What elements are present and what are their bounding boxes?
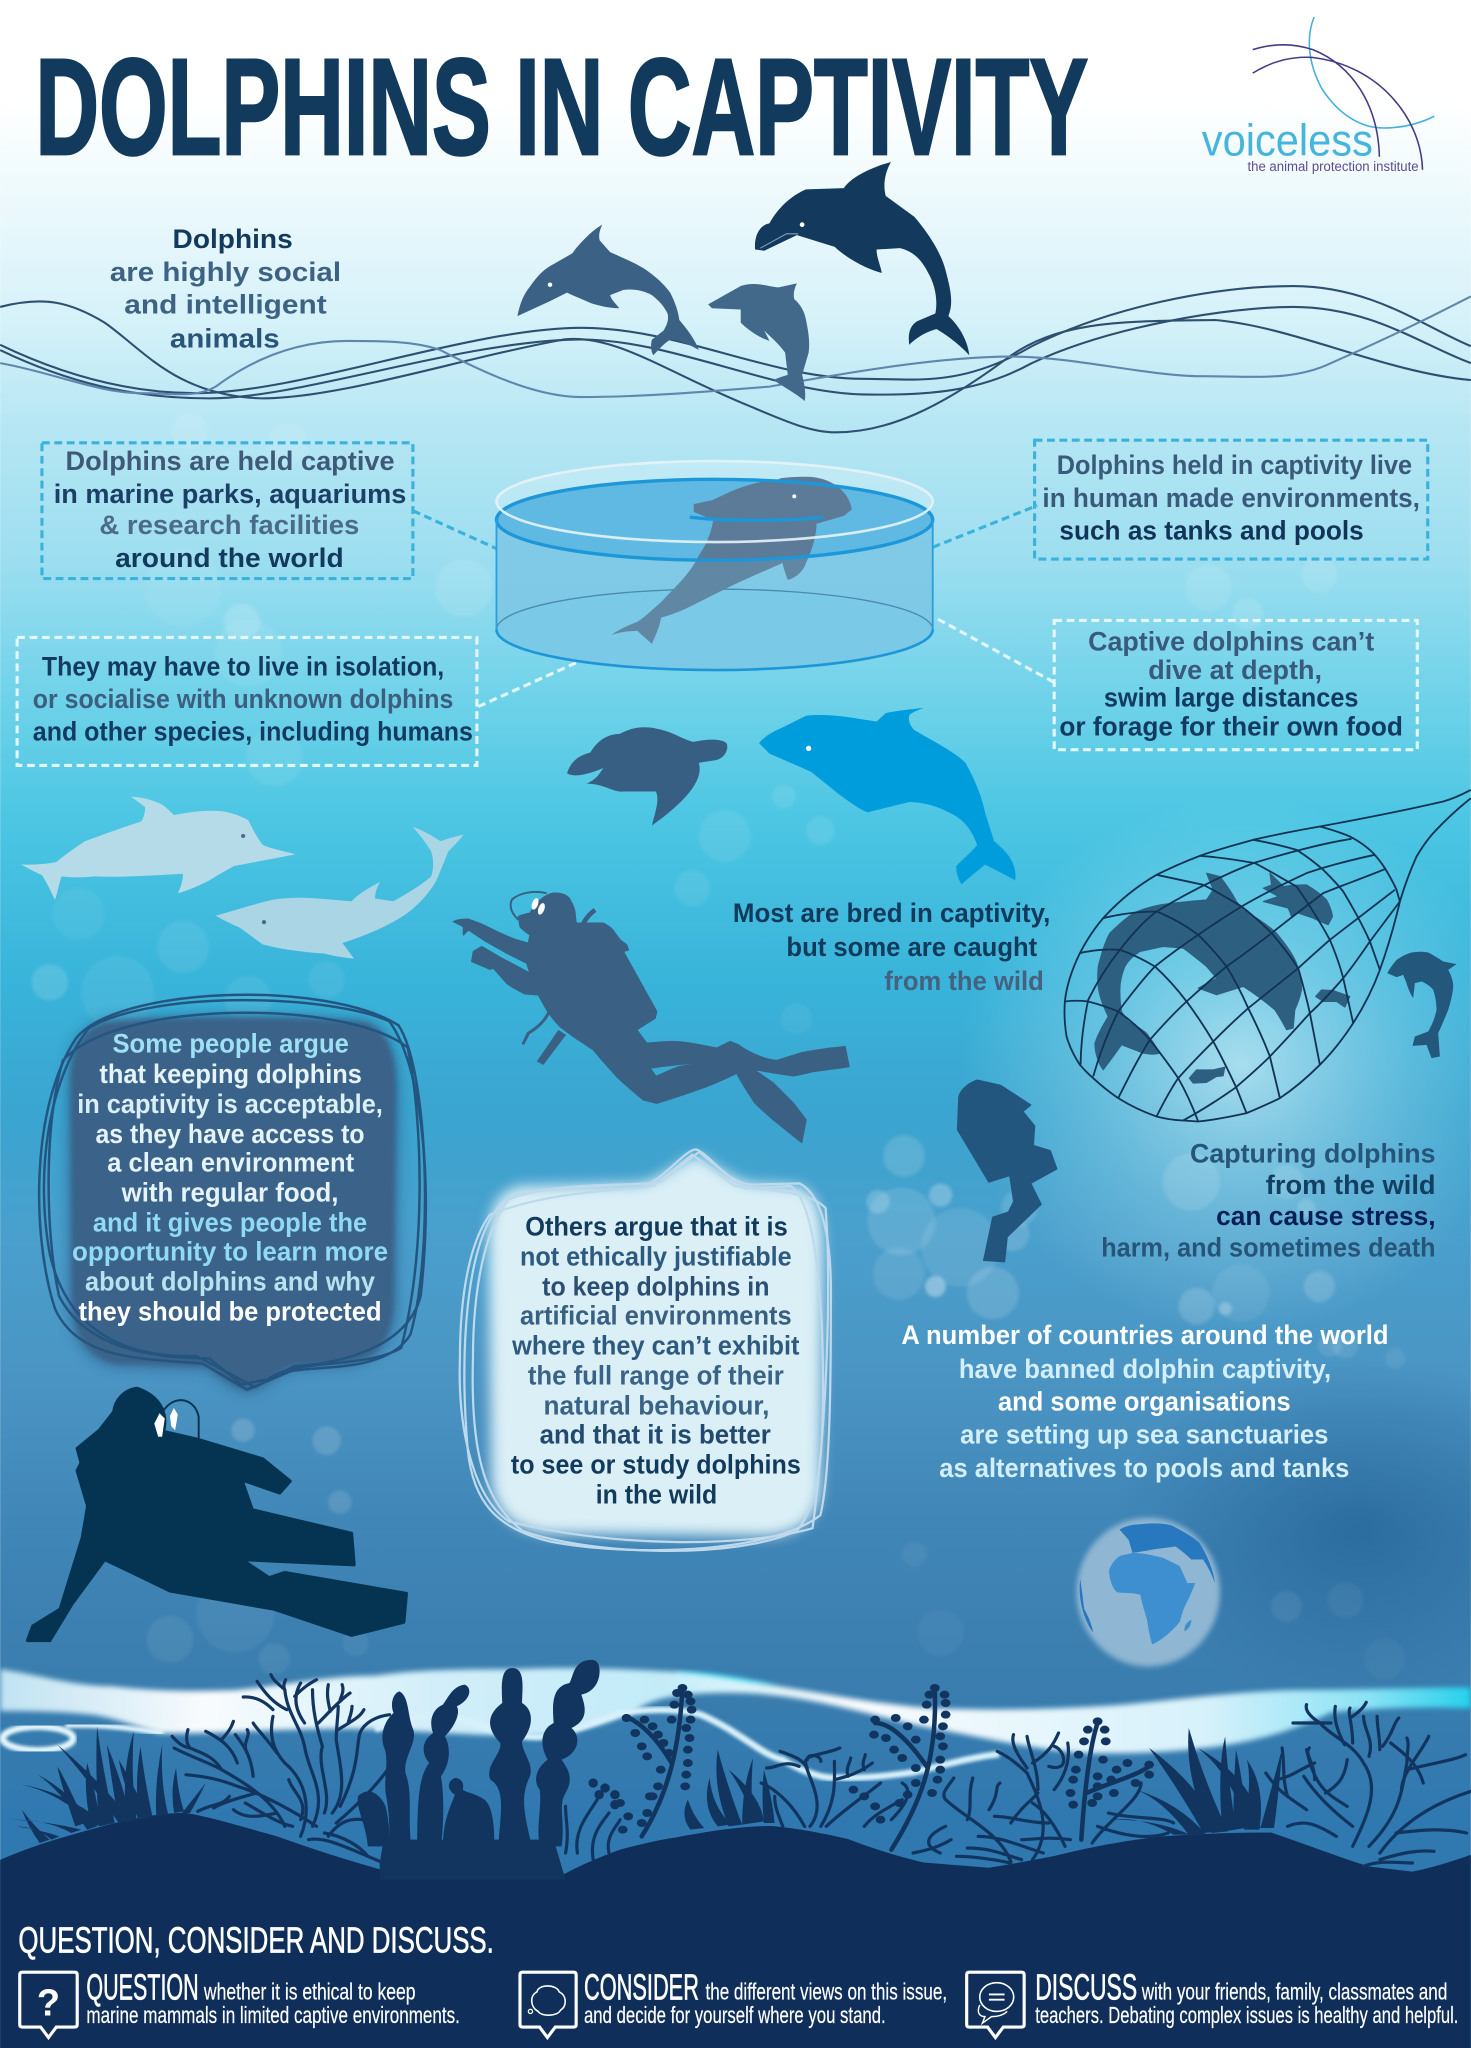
speech bubble: not justifiable view: natural behaviour, <box>543 1391 769 1421</box>
speech bubble: not justifiable view: to see or study dolphins <box>511 1449 801 1479</box>
text: dolphins are social: are highly social <box>110 257 341 287</box>
speech bubble: acceptable view: opportunity to learn more <box>72 1236 388 1266</box>
dolphin: pale swimming left <box>21 797 295 900</box>
pool callout: isolation <box>17 637 477 765</box>
footer heading: QUESTION, CONSIDER AND DISCUSS. <box>18 1920 494 1961</box>
text: dolphins are social: and intelligent <box>124 289 327 319</box>
diver: mid swimming <box>453 892 849 1143</box>
pool callout: isolation: They may have to live in isolation, <box>42 651 444 681</box>
speech bubble: not justifiable view: not ethically justifiable <box>520 1242 792 1272</box>
dolphin: large dark leaping <box>755 162 969 355</box>
footer hills <box>0 1813 1471 2048</box>
pool callout: held captive: Dolphins are held captive <box>65 446 395 476</box>
pool callout: cannot dive: or forage for their own food <box>1059 711 1403 741</box>
speech bubble: acceptable view: that keeping dolphins <box>99 1059 362 1089</box>
speech bubble: acceptable view: about dolphins and why <box>85 1266 375 1296</box>
text: dolphins are social <box>110 224 341 353</box>
pool callout: human made environments: in human made environments, <box>1042 483 1420 513</box>
speech bubble: not justifiable view: the full range of their <box>528 1360 784 1390</box>
pool callout: held captive: in marine parks, aquariums <box>54 479 406 509</box>
pool callout: isolation: or socialise with unknown dolphins <box>33 684 453 714</box>
white surface band <box>0 1668 1471 1778</box>
text: capturing dolphins <box>1101 1138 1436 1262</box>
consider text: the different views on this issue, <box>705 1979 947 2005</box>
discuss text: DISCUSS <box>1035 1967 1137 2008</box>
text: capturing dolphins: from the wild <box>1266 1170 1436 1200</box>
speech bubble: acceptable view: Some people argue <box>112 1029 349 1059</box>
pool callout: human made environments <box>1035 440 1428 559</box>
question text: whether it is ethical to keep <box>203 1979 416 2005</box>
text: capturing dolphins: can cause stress, <box>1216 1201 1436 1231</box>
turtle <box>567 727 727 825</box>
speech bubble: acceptable view: and it gives people the <box>93 1208 367 1238</box>
wave lines <box>0 286 1471 432</box>
pool callout: cannot dive: swim large distances <box>1104 683 1359 713</box>
seabed plants right: pods, coral and grass <box>615 1684 1471 1866</box>
question text <box>86 1967 460 2028</box>
icon: consider thought bubble <box>520 1972 576 2038</box>
text: dolphins are social: Dolphins <box>173 224 293 254</box>
text: capturing dolphins: harm, and sometimes death <box>1101 1232 1436 1262</box>
consider text <box>584 1967 947 2028</box>
speech bubble: not justifiable view: artificial environments <box>520 1300 792 1330</box>
pool callout: cannot dive: dive at depth, <box>1148 655 1322 685</box>
text: countries banned captivity: are setting up sea sanctuaries <box>960 1419 1328 1449</box>
speech bubble: acceptable view <box>39 995 426 1390</box>
text: countries banned captivity <box>901 1320 1389 1483</box>
speech bubble: acceptable view: they should be protected <box>79 1296 382 1326</box>
consider text: and decide for yourself where you stand. <box>584 2002 886 2028</box>
fishing net <box>1064 790 1471 1121</box>
speech bubble: acceptable view: as they have access to <box>95 1119 365 1149</box>
speech bubble: acceptable view: a clean environment <box>107 1148 354 1178</box>
text: most are bred in captivity: but some are caught <box>786 932 1037 962</box>
discuss text <box>1035 1967 1458 2028</box>
logo: voiceless: voiceless <box>1202 116 1373 165</box>
dolphin: small leaping <box>708 283 809 401</box>
diver: large dark foreground <box>28 1388 406 1640</box>
speech bubble: not justifiable view: to keep dolphins in <box>542 1272 769 1302</box>
dashed connectors to pool <box>413 505 1056 707</box>
text: most are bred in captivity: Most are bred in captivity, <box>733 898 1050 928</box>
speech bubble: not justifiable view: where they can’t exhibit <box>511 1330 800 1360</box>
pool callout: held captive: & research facilities <box>99 510 359 540</box>
question text: marine mammals in limited captive environments. <box>86 2002 460 2028</box>
pool callout: isolation: and other species, including humans <box>33 717 473 747</box>
seabed plants left: grass, coral and kelp <box>12 1660 620 1880</box>
dolphin: medium leaping <box>517 225 699 355</box>
speech bubble: acceptable view: with regular food, <box>121 1178 338 1208</box>
text: countries banned captivity: A number of countries around the world <box>901 1320 1389 1350</box>
dolphin: bright blue <box>759 708 1016 884</box>
question text: QUESTION <box>86 1967 199 2008</box>
icon: globe <box>1076 1518 1220 1667</box>
pool callout: held captive <box>42 443 413 579</box>
icon: question mark bubble: ? <box>37 1982 60 2024</box>
pool callout: cannot dive: Captive dolphins can’t <box>1088 626 1374 656</box>
text: countries banned captivity: as alternatives to pools and tanks <box>939 1453 1349 1483</box>
text: countries banned captivity: have banned dolphin captivity, <box>959 1354 1331 1384</box>
speech bubble: not justifiable view: Others argue that it is <box>525 1212 788 1242</box>
text: most are bred in captivity: from the wild <box>884 966 1044 996</box>
dolphin: pale swimming right <box>216 827 464 959</box>
icon: question mark bubble <box>20 1972 77 2038</box>
pool callout: held captive: around the world <box>115 543 344 573</box>
dolphin: small right of net <box>1387 952 1457 1058</box>
speech bubble: acceptable view: in captivity is acceptable, <box>77 1089 383 1119</box>
consider text: CONSIDER <box>584 1967 699 2008</box>
pool with dolphin <box>496 461 933 670</box>
footer panel: question, consider, discuss <box>18 1920 1458 2038</box>
text: most are bred in captivity <box>733 898 1050 996</box>
net dolphin and fish <box>1095 873 1350 1083</box>
pool callout: human made environments: Dolphins held in captivity live <box>1057 450 1412 480</box>
pool callout: cannot dive <box>1054 620 1417 750</box>
logo: voiceless <box>1202 17 1434 174</box>
logo: voiceless: the animal protection institute <box>1248 159 1419 174</box>
speech bubble: not justifiable view <box>460 1149 831 1551</box>
pool callout: human made environments: such as tanks and pools <box>1059 515 1364 545</box>
speech bubble: not justifiable view: and that it is better <box>540 1419 771 1449</box>
text: capturing dolphins: Capturing dolphins <box>1190 1138 1436 1168</box>
icon: discuss speech bubbles <box>967 1972 1024 2038</box>
text: dolphins are social: animals <box>170 323 280 353</box>
diver: small vertical <box>958 1080 1057 1262</box>
speech bubble: not justifiable view: in the wild <box>596 1479 717 1509</box>
bokeh bubbles <box>32 413 1406 1680</box>
text: countries banned captivity: and some organisations <box>998 1387 1291 1417</box>
